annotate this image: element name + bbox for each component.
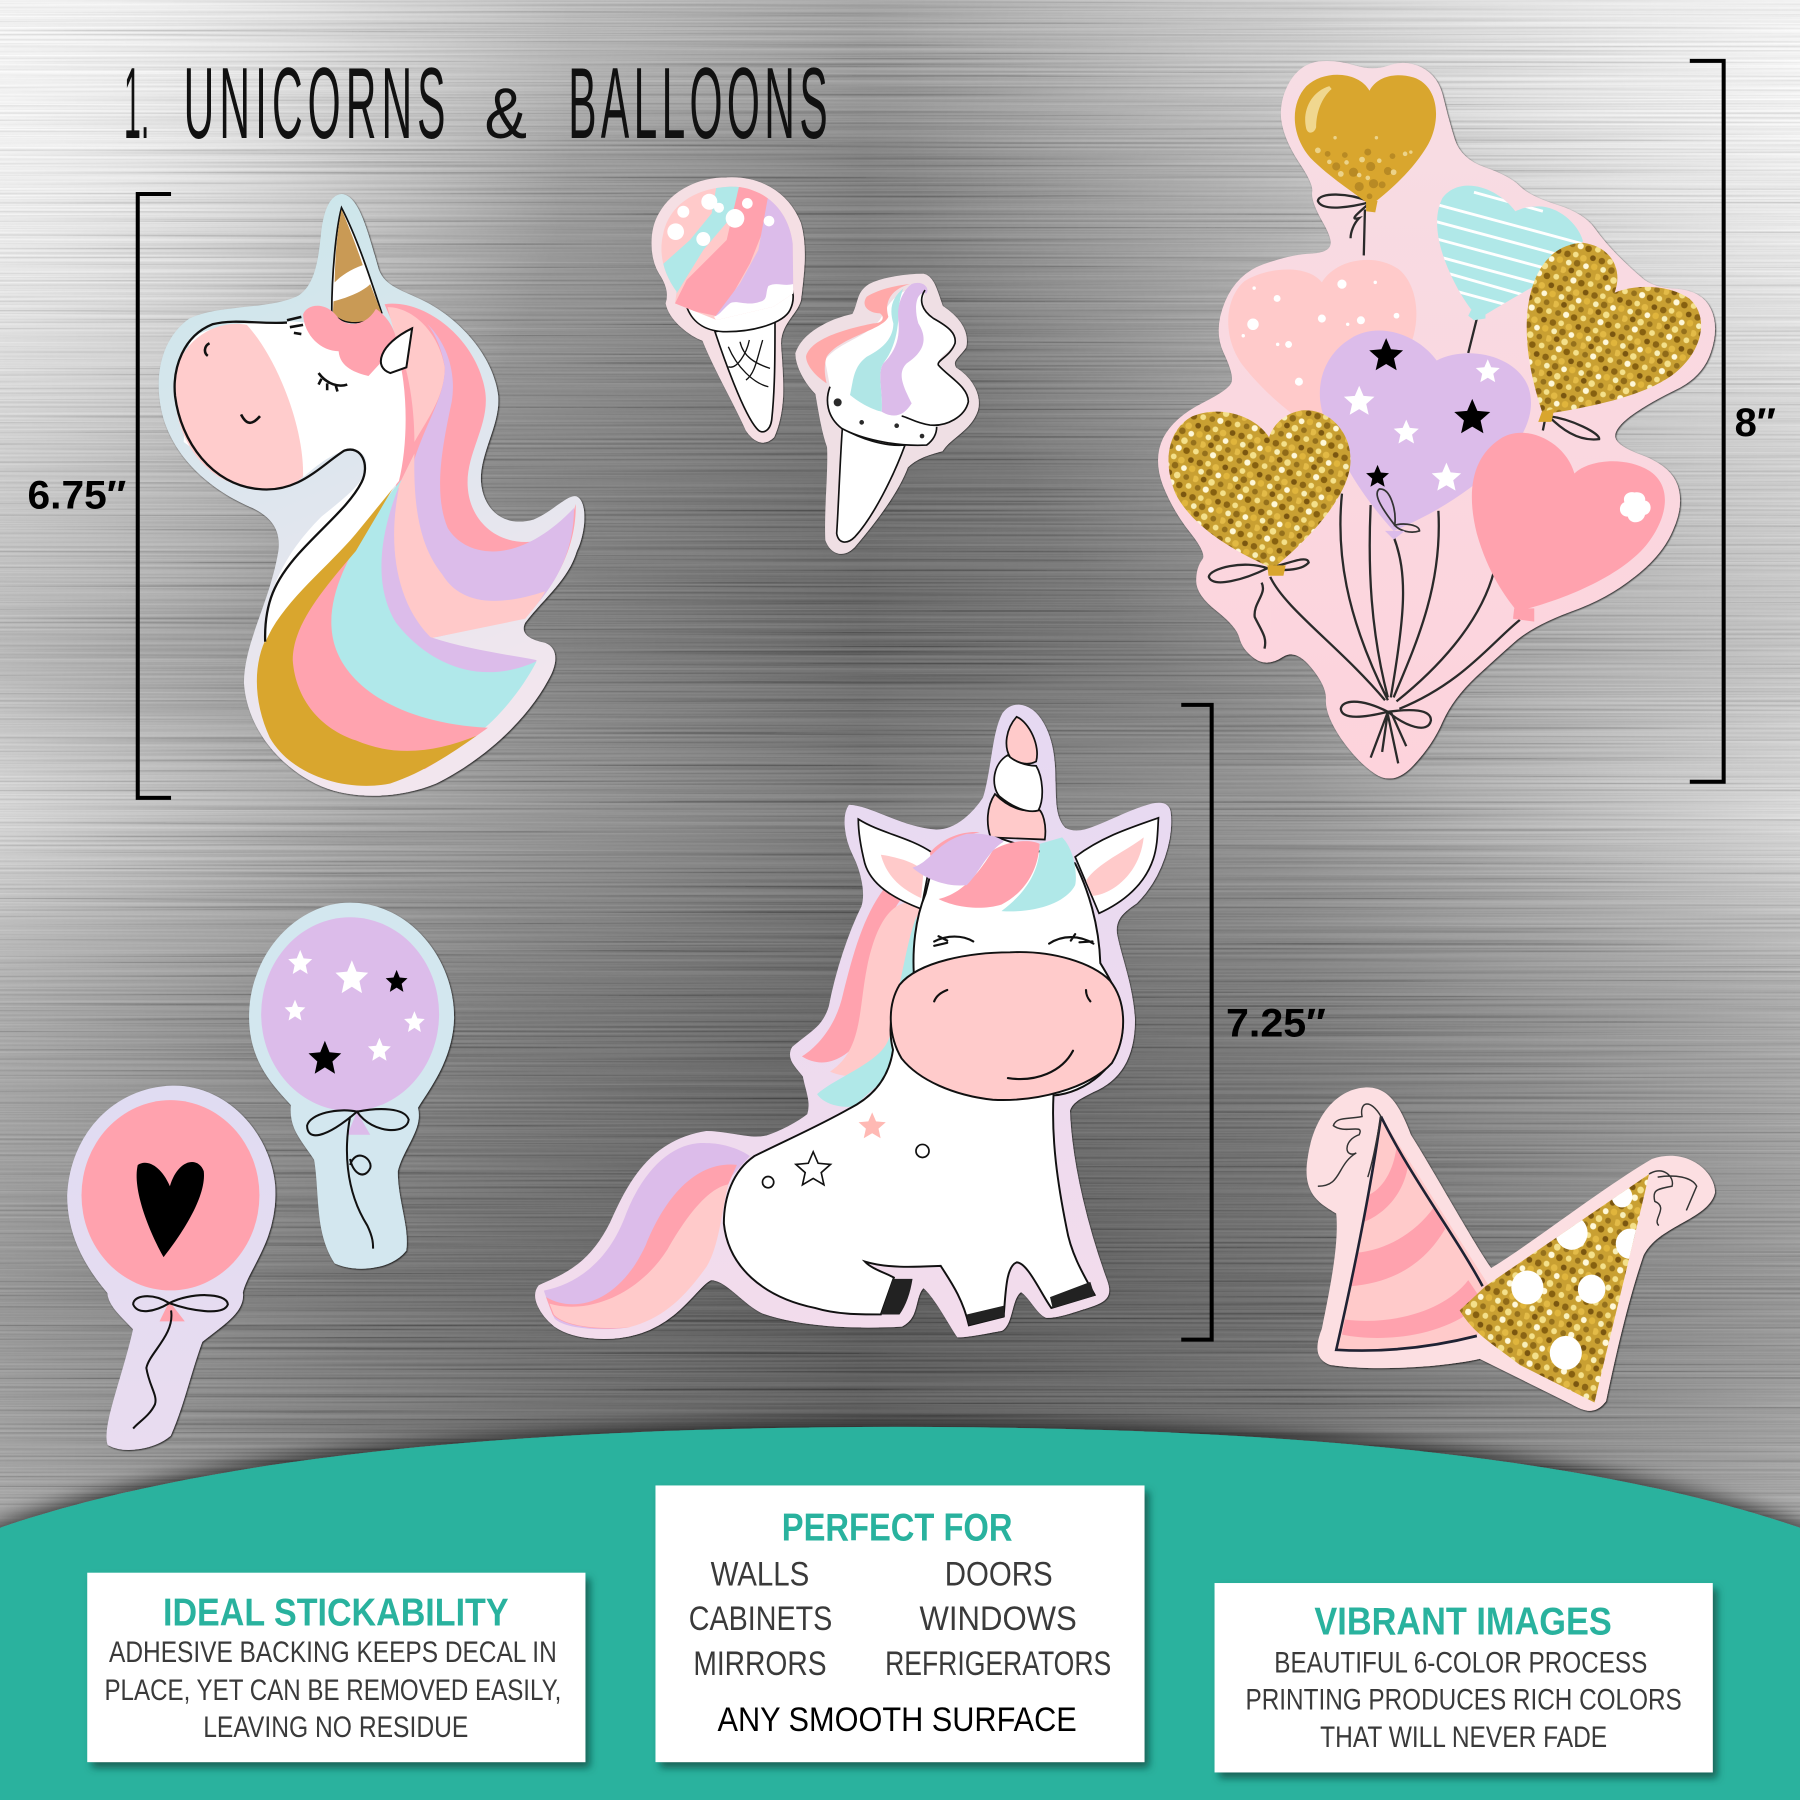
title: UNICORNS bbox=[184, 48, 445, 160]
card: ideal stickability: PLACE, YET CAN BE REMOVED EASILY, bbox=[104, 1674, 561, 1707]
glitter heart balloon right bbox=[1527, 243, 1701, 422]
card: ideal stickability bbox=[87, 1573, 585, 1762]
sticker: pink heart balloon bbox=[69, 1087, 274, 1448]
pink striped hat bbox=[1334, 1116, 1488, 1352]
unicorn body marks bbox=[762, 1112, 929, 1188]
sticker: soft serve ice cream bbox=[797, 275, 978, 553]
dimension bracket: 8 inches bbox=[1690, 61, 1776, 782]
unicorn mane bbox=[802, 883, 921, 1107]
dimension bracket: 7.25 inches: 7.25″ bbox=[1226, 1001, 1326, 1046]
sticker: party hats bbox=[1307, 1087, 1715, 1411]
card: ideal stickability: IDEAL STICKABILITY bbox=[163, 1592, 509, 1635]
unicorn horn bbox=[988, 717, 1045, 840]
purple star heart balloon bbox=[1320, 331, 1531, 540]
gold heart balloon bbox=[1295, 75, 1436, 212]
pink heart balloon bbox=[1472, 433, 1665, 622]
pale pink heart balloon bbox=[1228, 260, 1416, 442]
title: 1. bbox=[124, 46, 149, 159]
head ear bbox=[381, 328, 412, 373]
card: perfect for: REFRIGERATORS bbox=[885, 1645, 1111, 1683]
card: perfect for: WINDOWS bbox=[920, 1600, 1077, 1638]
aqua striped heart balloon bbox=[1434, 186, 1583, 320]
sticker: unicorn head bbox=[159, 194, 584, 796]
head outline bbox=[175, 322, 365, 642]
head mane layers bbox=[257, 304, 576, 786]
sticker: sitting unicorn bbox=[536, 706, 1170, 1338]
unicorn tail bbox=[544, 1143, 750, 1329]
dimension bracket: 6.75 inches: 6.75″ bbox=[28, 473, 126, 518]
gold glitter hat bbox=[1460, 1174, 1649, 1403]
title: & bbox=[484, 75, 527, 154]
card: perfect for: MIRRORS bbox=[693, 1645, 827, 1683]
dimension bracket: 8 inches: 8″ bbox=[1735, 400, 1776, 445]
card: perfect for: WALLS bbox=[711, 1555, 809, 1593]
unicorn hooves bbox=[881, 1279, 1095, 1325]
unicorn forelock bbox=[913, 832, 1076, 911]
unicorn ears bbox=[858, 818, 1158, 913]
dimension bracket: 7.25 inches bbox=[1181, 705, 1326, 1340]
unicorn body bbox=[724, 837, 1123, 1325]
curly strings bbox=[1318, 1104, 1697, 1226]
card: ideal stickability: LEAVING NO RESIDUE bbox=[203, 1711, 468, 1744]
card: perfect for: PERFECT FOR bbox=[782, 1507, 1013, 1550]
balloon strings bbox=[1209, 195, 1599, 763]
card: vibrant images: PRINTING PRODUCES RICH COLORS bbox=[1246, 1683, 1682, 1716]
sticker: purple star balloon bbox=[251, 904, 452, 1267]
glitter heart balloon left bbox=[1168, 410, 1351, 576]
card: perfect for bbox=[655, 1485, 1145, 1762]
head forelock bbox=[303, 306, 397, 376]
title bbox=[124, 46, 828, 160]
card: perfect for: ANY SMOOTH SURFACE bbox=[717, 1701, 1077, 1739]
card: vibrant images: THAT WILL NEVER FADE bbox=[1320, 1721, 1607, 1754]
teal footer band bbox=[0, 1427, 1800, 1800]
head eyes and mouth bbox=[205, 317, 347, 423]
card: vibrant images: BEAUTIFUL 6-COLOR PROCESS bbox=[1274, 1647, 1647, 1680]
sticker: balloon bunch bbox=[1160, 63, 1713, 776]
dimension bracket: 6.75 inches bbox=[28, 194, 171, 798]
card: perfect for: DOORS bbox=[945, 1555, 1053, 1593]
card: vibrant images bbox=[1215, 1583, 1713, 1772]
card: vibrant images: VIBRANT IMAGES bbox=[1314, 1601, 1612, 1644]
sticker: ice cream scoop bbox=[652, 178, 804, 442]
card: perfect for: CABINETS bbox=[689, 1600, 832, 1638]
title: BALLOONS bbox=[568, 48, 828, 160]
head muzzle bbox=[175, 324, 303, 489]
head white face bbox=[184, 321, 406, 643]
unicorn face lines bbox=[934, 934, 1093, 1079]
head horn bbox=[332, 208, 382, 323]
card: ideal stickability: ADHESIVE BACKING KEEPS DECAL IN bbox=[109, 1636, 557, 1669]
unicorn muzzle bbox=[891, 952, 1123, 1100]
